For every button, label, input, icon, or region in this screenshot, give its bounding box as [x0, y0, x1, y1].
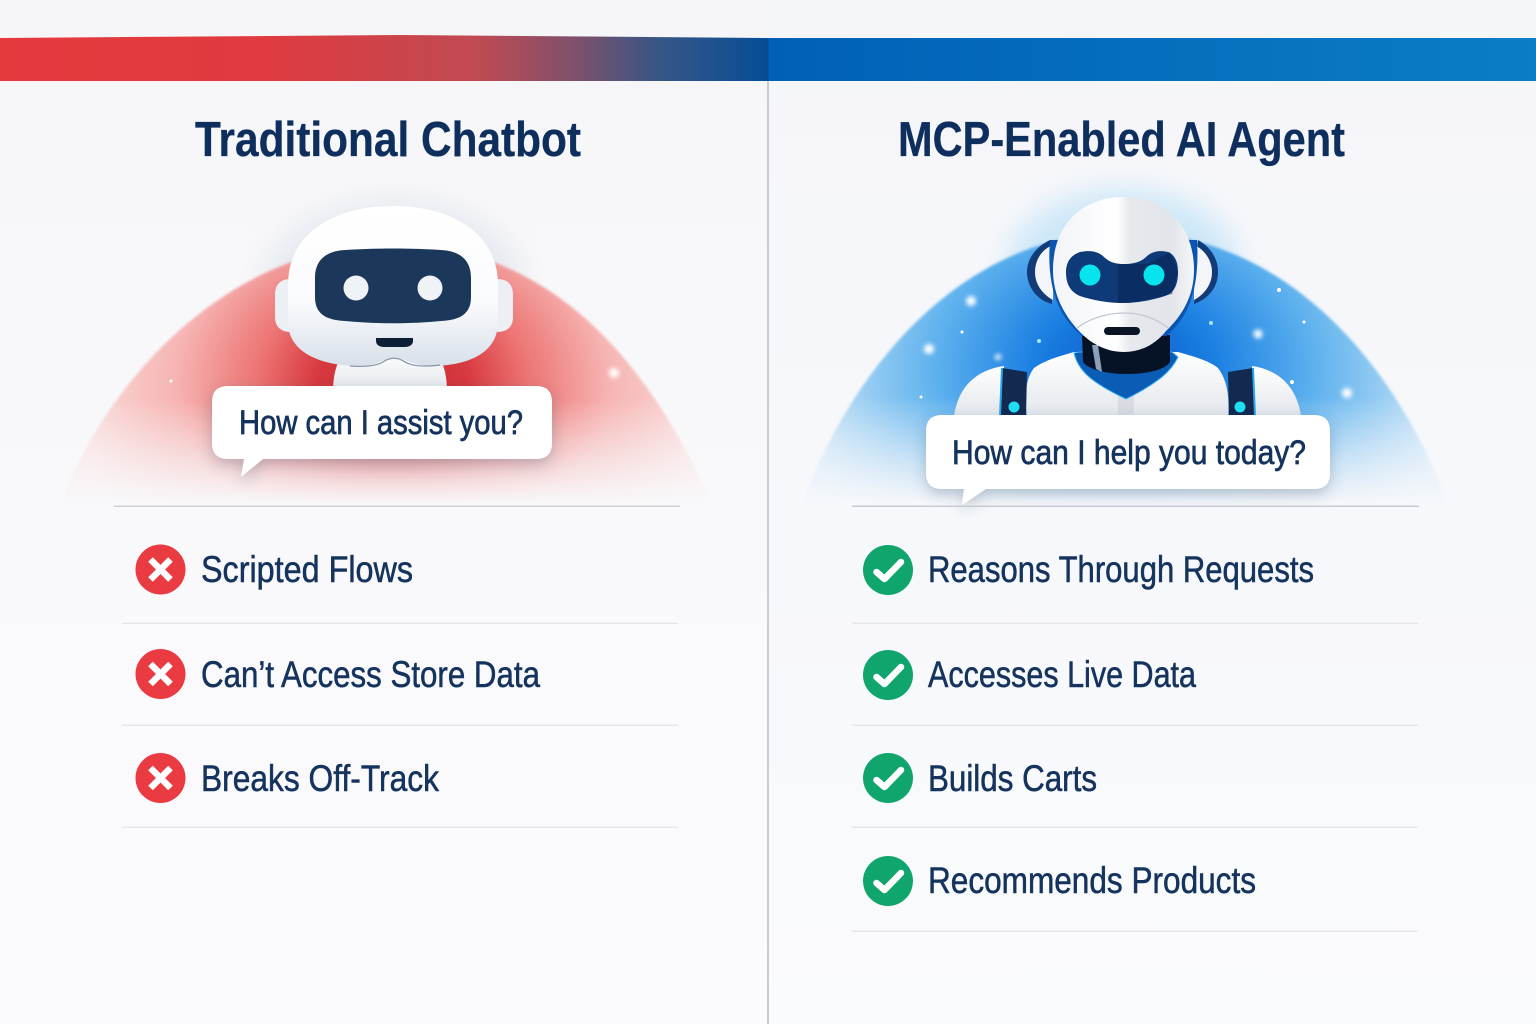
speech bubble	[926, 415, 1330, 505]
robot head	[1053, 197, 1194, 352]
robot eyes	[1080, 264, 1164, 286]
item: Accesses Live Data	[863, 650, 1196, 700]
icon: advanced robot	[954, 197, 1301, 416]
icon: green check	[863, 753, 913, 803]
item: Scripted Flows	[136, 544, 413, 594]
head halo	[263, 200, 523, 370]
speech bubble: How can I help you today?	[952, 434, 1306, 472]
top colour bar	[0, 35, 1536, 81]
robot visor	[1066, 251, 1178, 303]
item: Breaks Off-Track	[136, 753, 439, 803]
icon: green check	[863, 650, 913, 700]
item: Recommends Products: Recommends Products	[928, 860, 1256, 901]
heading: Traditional Chatbot: Traditional Chatbot	[195, 113, 581, 167]
robot ears	[275, 279, 513, 332]
item: Accesses Live Data: Accesses Live Data	[928, 654, 1196, 695]
jaw seam	[1077, 313, 1168, 328]
red dome backdrop	[76, 260, 696, 498]
icon: green check	[863, 545, 913, 595]
item: Builds Carts: Builds Carts	[928, 758, 1097, 799]
blue head edge	[1049, 240, 1197, 336]
robot visor	[315, 248, 471, 323]
item: Builds Carts	[863, 753, 1097, 803]
robot head	[288, 206, 498, 366]
speech bubble: How can I assist you?	[239, 404, 523, 442]
robot eyes	[344, 276, 442, 300]
item: Can't Access Store Data: Can’t Access Store Data	[201, 654, 540, 695]
item: Can't Access Store Data	[136, 649, 540, 699]
section divider	[852, 506, 1419, 507]
item: Scripted Flows: Scripted Flows	[201, 549, 413, 590]
speech bubble	[212, 386, 552, 477]
icon: red cross	[136, 544, 186, 594]
item: Reasons Through Requests	[863, 545, 1314, 595]
blue glow behind head	[1008, 190, 1238, 340]
robot torso	[954, 352, 1301, 416]
item: Breaks Off-Track: Breaks Off-Track	[201, 758, 439, 799]
robot neck	[333, 350, 447, 392]
robot headphones	[1027, 240, 1218, 304]
icon: simple chatbot robot	[275, 206, 513, 392]
robot neck	[1082, 335, 1170, 374]
chin seam	[350, 358, 440, 366]
centre divider	[767, 81, 769, 1024]
section divider	[114, 506, 680, 507]
robot mouth	[1104, 327, 1140, 335]
icon: green check	[863, 856, 913, 906]
heading: MCP-Enabled AI Agent: MCP-Enabled AI Agent	[898, 113, 1345, 167]
item: Recommends Products	[863, 856, 1256, 906]
icon: red cross	[136, 649, 186, 699]
robot mouth	[376, 338, 413, 347]
panel: traditional chatbot	[60, 113, 712, 828]
panel: MCP-enabled AI agent	[802, 113, 1448, 932]
item: Reasons Through Requests: Reasons Through Requests	[928, 549, 1314, 590]
blue dome backdrop	[802, 232, 1448, 505]
icon: red cross	[136, 753, 186, 803]
